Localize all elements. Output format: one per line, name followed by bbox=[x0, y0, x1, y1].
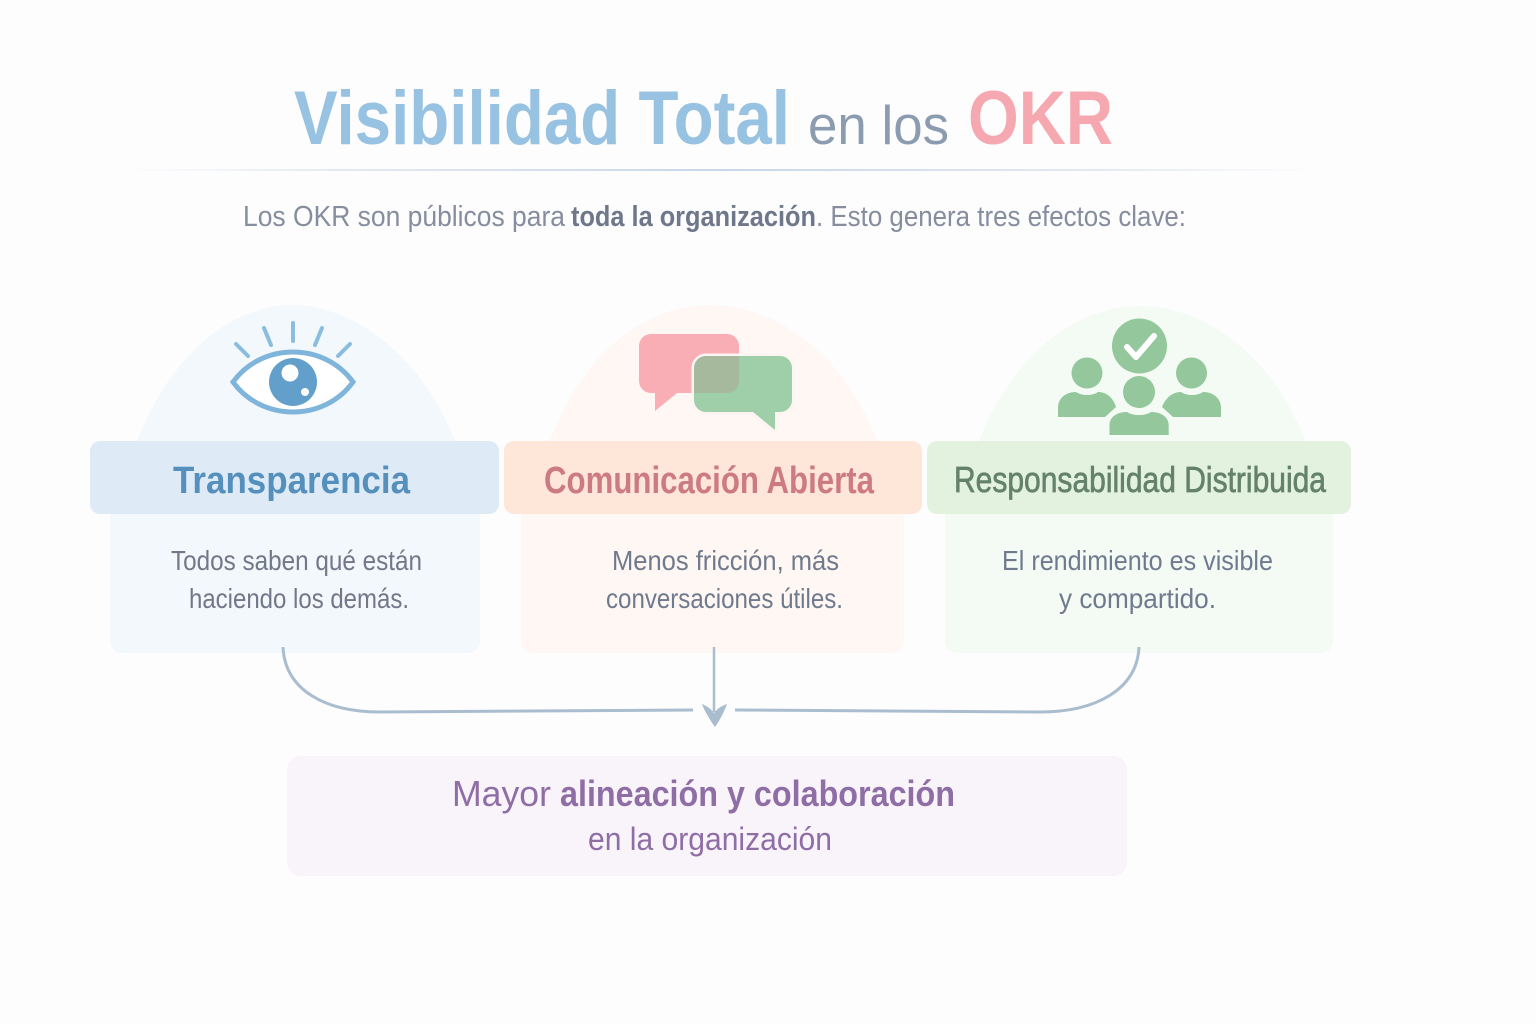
panel: comunicacion bbox=[504, 305, 922, 653]
text: comunicacion: conversaciones útiles. bbox=[606, 583, 843, 614]
text: transparencia: Todos saben qué están bbox=[171, 545, 422, 576]
result text: Mayor bbox=[452, 773, 551, 814]
panel: responsabilidad bbox=[927, 306, 1351, 653]
title: en los bbox=[808, 94, 949, 156]
result text: alineación y colaboración bbox=[560, 773, 955, 814]
heading: comunicacion: Comunicación Abierta bbox=[544, 460, 875, 502]
subtitle: . Esto genera tres efectos clave: bbox=[816, 201, 1186, 233]
panel background: comunicacion bbox=[521, 305, 904, 653]
panel: transparencia bbox=[90, 305, 499, 653]
text: responsabilidad: El rendimiento es visible bbox=[1002, 545, 1273, 576]
icon: chat bubbles bbox=[639, 334, 792, 430]
icon: eye bbox=[233, 323, 353, 412]
title: Visibilidad Total bbox=[294, 76, 790, 161]
icon: team with check bbox=[1058, 318, 1221, 435]
arrow: connectors to result bbox=[283, 647, 1139, 727]
text: responsabilidad: y compartido. bbox=[1059, 583, 1216, 614]
panel background: responsabilidad bbox=[945, 306, 1333, 653]
text: comunicacion: Menos fricción, más bbox=[612, 545, 839, 576]
heading: responsabilidad: Responsabilidad Distribuida bbox=[954, 459, 1327, 500]
text: transparencia bbox=[171, 545, 422, 614]
heading: transparencia: Transparencia bbox=[173, 460, 411, 502]
text: responsabilidad bbox=[1002, 545, 1273, 614]
result text: en la organización bbox=[588, 821, 832, 857]
subtitle: toda la organización bbox=[571, 201, 816, 233]
subtitle: Los OKR son públicos para bbox=[243, 201, 566, 233]
text: comunicacion bbox=[606, 545, 843, 614]
panel: result bbox=[287, 756, 1127, 876]
heading: transparencia bbox=[90, 441, 499, 514]
panel background: transparencia bbox=[110, 305, 480, 653]
title: OKR bbox=[968, 76, 1113, 161]
text: transparencia: haciendo los demás. bbox=[189, 583, 409, 614]
heading: comunicacion bbox=[504, 441, 922, 514]
result text bbox=[452, 773, 955, 857]
heading: responsabilidad bbox=[927, 441, 1351, 514]
